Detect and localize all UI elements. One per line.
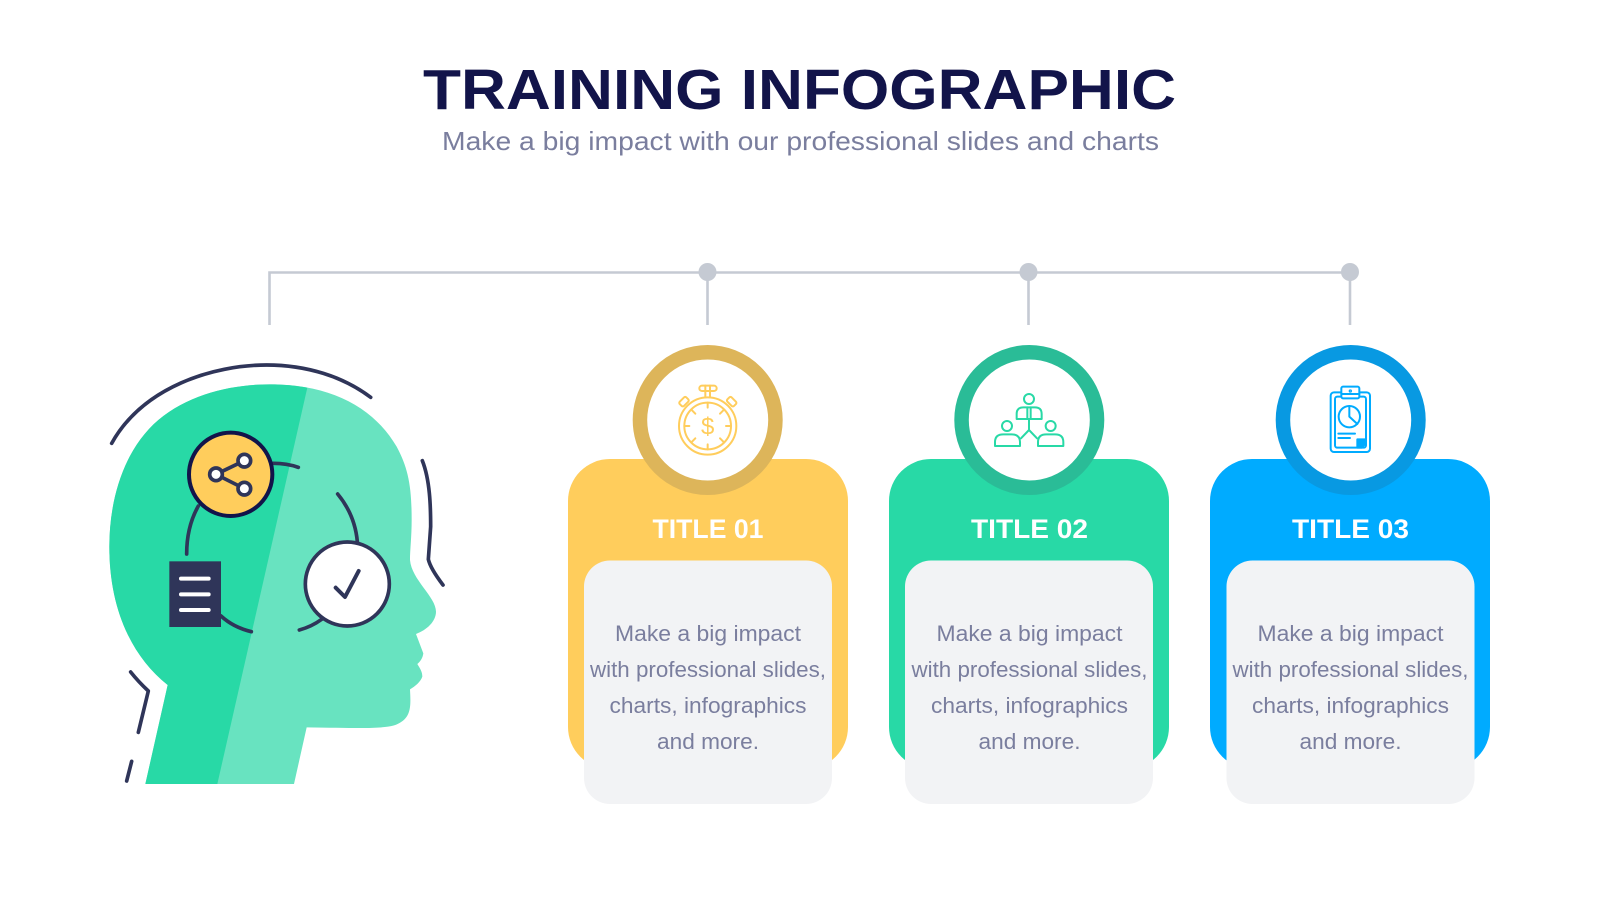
body text: with professional slides, (589, 657, 826, 682)
card title: TITLE 03 (1292, 514, 1409, 544)
icon: check (305, 542, 389, 626)
icon badge ring (1283, 352, 1418, 488)
body text: and more. (978, 729, 1080, 754)
head silhouette light (109, 384, 436, 784)
outer contour strokes (112, 365, 443, 781)
card background (1210, 459, 1490, 769)
body text: and more. (657, 729, 759, 754)
subtitle: Make a big impact with our professional slides and charts (442, 126, 1159, 156)
body text: Make a big impact (1258, 621, 1444, 646)
circuit links (187, 463, 357, 632)
body text: Make a big impact (936, 621, 1122, 646)
connector lines (270, 263, 1359, 325)
body panel (1226, 560, 1474, 804)
icon badge ring (962, 352, 1097, 488)
panel: title 03 (1210, 352, 1490, 804)
card background (568, 459, 848, 769)
icon: stopwatch (679, 386, 737, 455)
body text: charts, infographics (1252, 693, 1449, 718)
panel: title 01 (568, 352, 848, 804)
title: TRAINING INFOGRAPHIC (423, 58, 1176, 122)
body panel (584, 560, 832, 804)
head silhouette dark (109, 384, 307, 784)
body text: with professional slides, (1231, 657, 1468, 682)
icon: stopwatch: $ (701, 414, 714, 441)
head illustration (109, 365, 443, 784)
card title: TITLE 02 (971, 514, 1088, 544)
card background (889, 459, 1169, 769)
body text (589, 621, 826, 754)
icon: clipboard chart (1331, 387, 1370, 452)
body text: with professional slides, (910, 657, 1148, 682)
icon: share (189, 433, 272, 516)
body text: charts, infographics (931, 693, 1128, 718)
icon: document (169, 561, 221, 627)
body text: charts, infographics (610, 693, 806, 718)
card title: TITLE 01 (652, 514, 764, 544)
body text (1231, 621, 1468, 754)
panel: title 02 (889, 352, 1169, 804)
body text: and more. (1300, 729, 1402, 754)
icon: team (995, 394, 1063, 446)
body text: Make a big impact (615, 621, 801, 646)
body text (910, 621, 1148, 754)
icon badge ring (640, 352, 775, 488)
body panel (905, 560, 1153, 804)
